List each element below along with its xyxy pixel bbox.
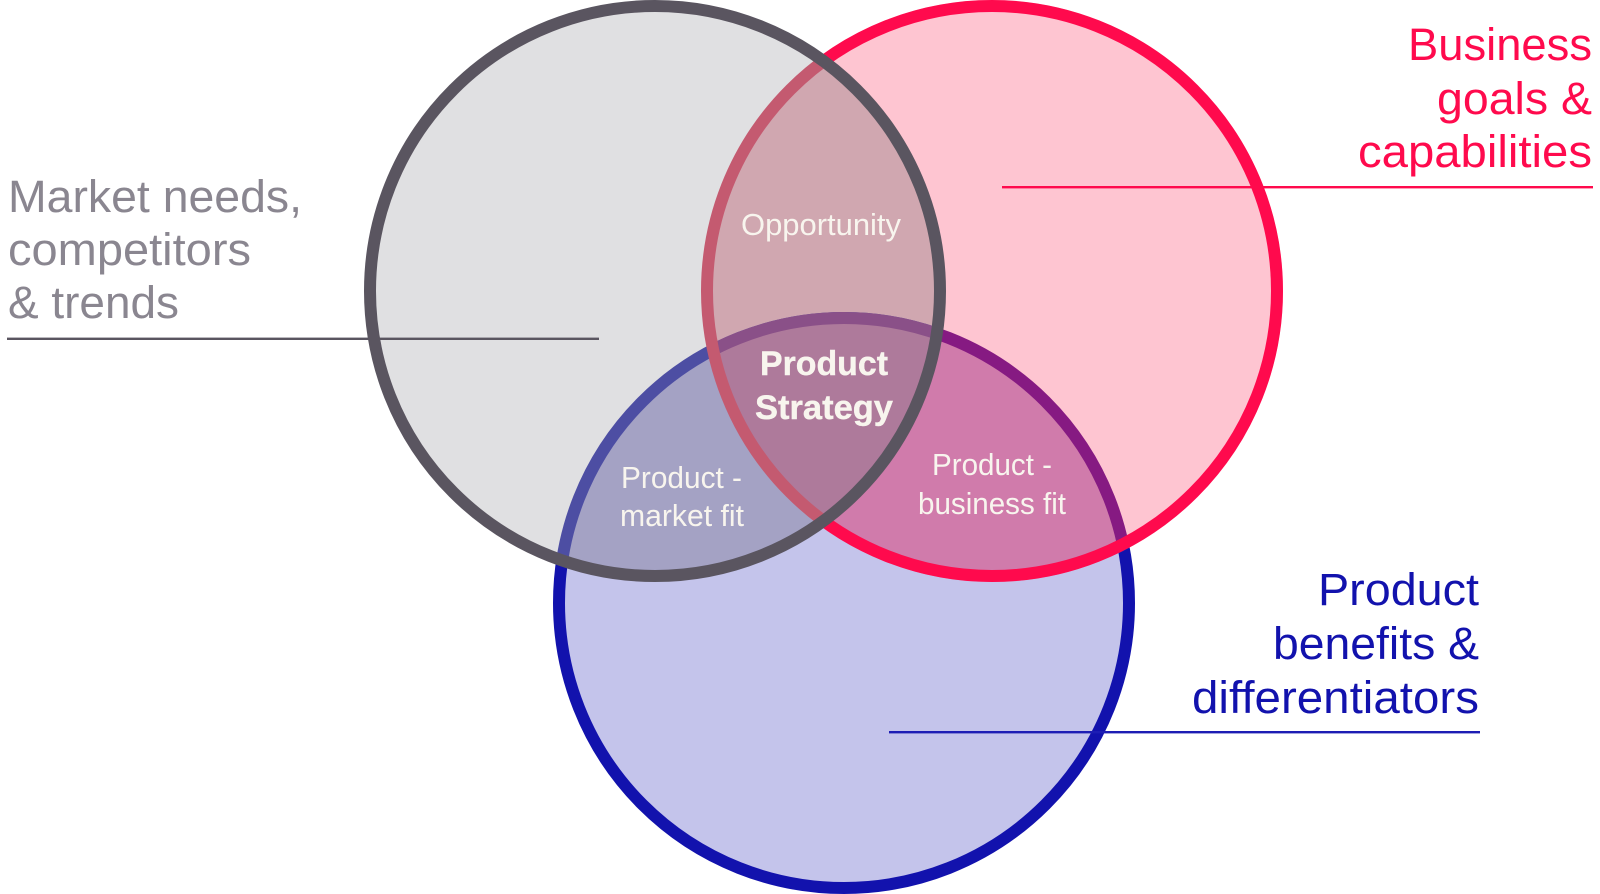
label: product strategy: Product [760,345,888,383]
label: product-market fit: Product - [621,460,742,495]
label: product benefits and differentiators [1192,564,1479,723]
label: business goals and capabilities: capabilities [1358,126,1592,177]
label: business goals and capabilities [1358,19,1592,177]
label: product strategy: Strategy [755,389,893,427]
grey circle outline [370,6,940,576]
label: product-market fit: market fit [620,498,744,533]
label: product benefits and differentiators: differentiators [1192,672,1479,723]
circle: product benefits and differentiators [559,318,1129,888]
label: product-business fit: business fit [918,486,1066,521]
label: product-market fit [620,460,744,533]
label: market needs, competitors and trends: competitors [8,224,251,275]
leader line: business [1002,186,1593,188]
label: market needs, competitors and trends [8,171,302,328]
leader line: market [7,338,599,340]
label: business goals and capabilities: Business [1408,19,1592,70]
circle: business goals and capabilities [824,0,1283,582]
label: product-business fit [918,447,1066,521]
label: business goals and capabilities: goals & [1437,73,1592,124]
circle: market needs, competitors and trends [376,12,934,570]
label: product benefits and differentiators: benefits & [1273,618,1479,669]
label: market needs, competitors and trends: & trends [8,277,179,328]
label: product-business fit: Product - [932,447,1052,482]
label: opportunity: Opportunity [741,207,901,242]
label: market needs, competitors and trends: Market needs, [8,171,302,222]
label: product strategy [755,345,893,427]
label: product benefits and differentiators: Product [1318,564,1479,615]
leader line: product [889,731,1480,733]
